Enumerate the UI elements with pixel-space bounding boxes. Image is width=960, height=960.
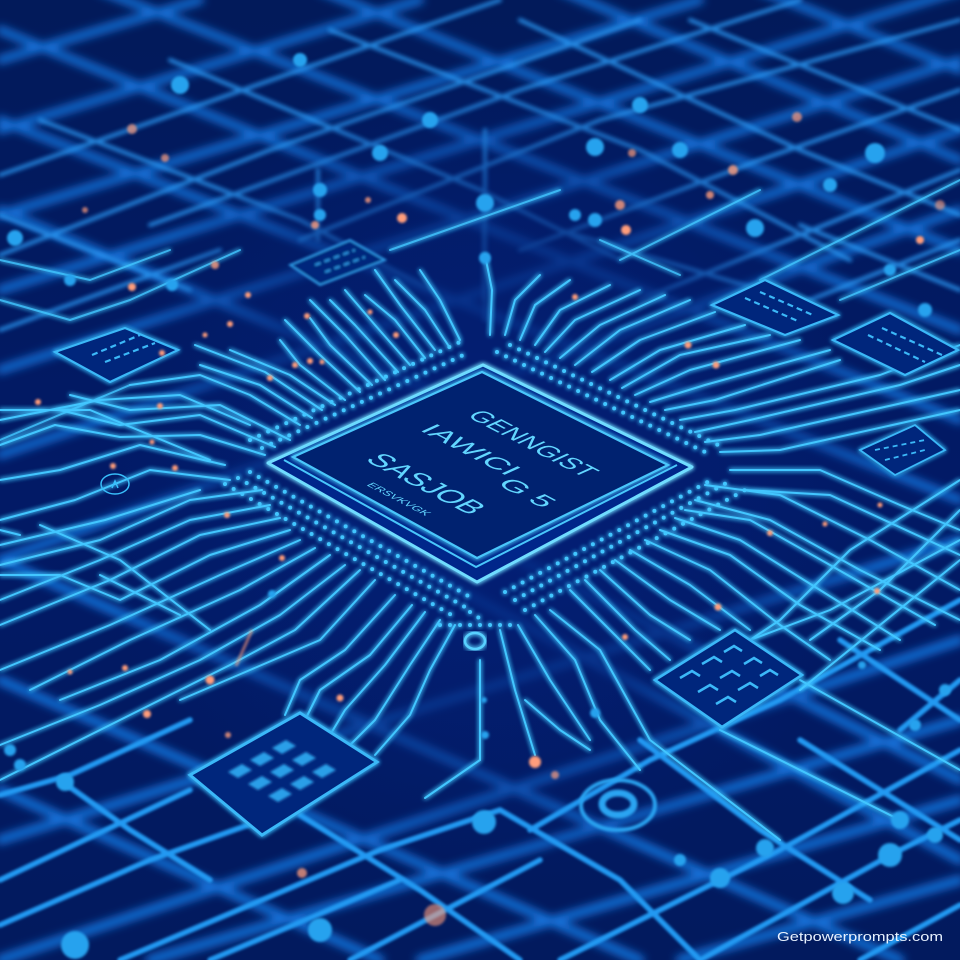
icon: small left ring xyxy=(101,474,129,494)
component: bottom-right chip xyxy=(655,630,802,727)
traces: right fan xyxy=(570,470,960,820)
chip outer package xyxy=(268,365,692,582)
chip double edge xyxy=(284,460,677,567)
component: right chip xyxy=(833,313,958,375)
pad rows around chip xyxy=(225,342,745,625)
chip markings: SASJOB xyxy=(358,450,493,518)
component: small right chip xyxy=(860,425,945,475)
chip markings: G 5 xyxy=(490,475,562,511)
traces: upper-left fan xyxy=(0,270,460,455)
traces: left fan xyxy=(0,410,375,780)
chip markings: GENNGIST xyxy=(460,407,604,481)
component: bottom-left chip xyxy=(190,713,377,835)
watermark: Getpowerprompts.com xyxy=(777,929,943,944)
component: upper-right chip xyxy=(712,280,838,335)
traces: bottom fan xyxy=(285,595,780,840)
chip markings: ERSVKVGK xyxy=(363,482,433,517)
circuit traces xyxy=(0,180,960,840)
traces: upper-right fan xyxy=(485,255,960,452)
component: left chip xyxy=(55,328,178,382)
foreground blurred traces at bottom xyxy=(0,600,960,960)
chip inner die xyxy=(293,372,668,558)
chip markings: IAWICI xyxy=(413,421,527,479)
medium depth lines xyxy=(0,0,960,330)
chip markings xyxy=(358,407,604,518)
icon: bottom ring connector xyxy=(581,780,655,830)
component: upper chip xyxy=(290,240,385,285)
central chip xyxy=(268,365,692,582)
icon: ring connector below chip xyxy=(465,633,485,649)
traces: upper left far xyxy=(0,180,960,440)
